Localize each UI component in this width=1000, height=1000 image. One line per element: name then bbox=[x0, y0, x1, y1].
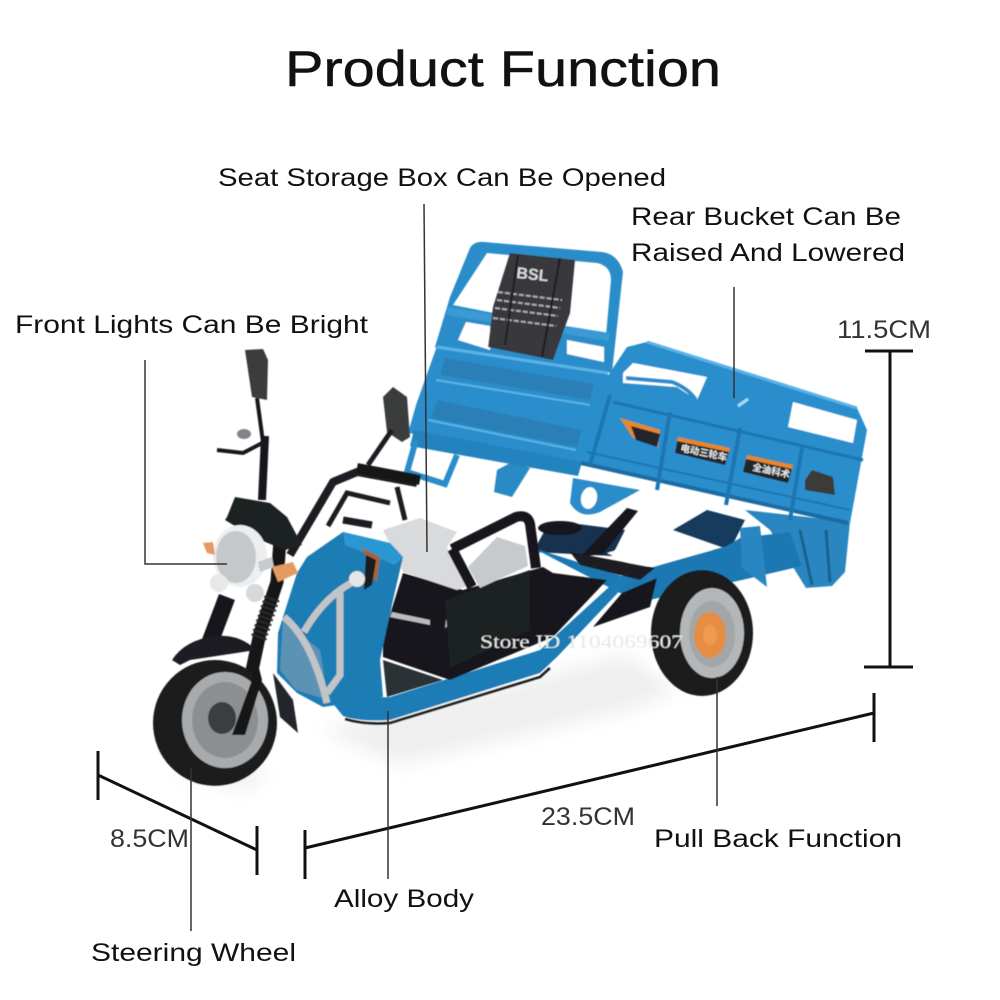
right bar and stem bbox=[290, 472, 417, 555]
label: rear bucket bbox=[631, 203, 905, 398]
headboard inner crossbar bbox=[447, 311, 609, 337]
sticker: 全油科术 bbox=[743, 455, 793, 483]
floor mat bbox=[383, 660, 443, 697]
battery box bbox=[383, 567, 607, 680]
stripe sticker bbox=[805, 470, 835, 495]
bucket side panel bbox=[580, 342, 867, 523]
ground shadow bbox=[170, 655, 680, 790]
headlight bbox=[210, 525, 267, 602]
title: Product Function bbox=[285, 41, 721, 97]
seat backrest handle bbox=[452, 516, 536, 587]
label: seat storage box: Seat Storage Box Can Be Opened bbox=[218, 164, 666, 192]
lower headboard openings bbox=[458, 322, 604, 362]
vent bbox=[360, 547, 380, 582]
dark under-bucket area bbox=[673, 510, 745, 550]
front shield bbox=[277, 532, 403, 707]
label: front lights: Front Lights Can Be Bright bbox=[15, 311, 368, 339]
front panel of bucket bbox=[408, 346, 608, 463]
label: rear bucket: Rear Bucket Can Be bbox=[631, 203, 901, 231]
seat cushion bbox=[383, 518, 470, 590]
rear wheel bbox=[651, 570, 753, 696]
label: seat storage box bbox=[218, 164, 666, 552]
main floor frame bbox=[330, 577, 630, 720]
front fork bbox=[240, 540, 280, 727]
lamp box bbox=[225, 497, 302, 550]
left mirror bbox=[245, 349, 268, 400]
watermark: Store ID 1104069607 bbox=[480, 632, 683, 653]
headboard straps bbox=[488, 253, 575, 360]
reflective mark bbox=[738, 399, 748, 406]
bucket rear support bracket bbox=[745, 510, 850, 588]
label: alloy body: Alloy Body bbox=[334, 885, 475, 913]
dimension: height 11.5CM: 11.5CM bbox=[837, 316, 931, 344]
dimension: height 11.5CM bbox=[837, 316, 931, 667]
side panel posts bbox=[590, 395, 802, 520]
rear chassis cross beam bbox=[533, 532, 802, 602]
turn signals bbox=[203, 542, 215, 555]
headboard frame bbox=[435, 242, 623, 380]
right mirror bbox=[383, 387, 410, 442]
crash bar bbox=[284, 580, 357, 703]
sticker: 电动三轮车: 电动三轮车 bbox=[679, 442, 729, 464]
dimension: width 8.5CM bbox=[98, 751, 257, 875]
sticker: 电动三轮车 bbox=[675, 437, 730, 465]
label: rear bucket: Raised And Lowered bbox=[631, 239, 905, 267]
lift strut bbox=[580, 508, 638, 557]
front fender bbox=[172, 636, 256, 665]
dimension: width 8.5CM: 8.5CM bbox=[110, 825, 189, 853]
rear fender bbox=[273, 673, 298, 733]
bucket lower lip bbox=[410, 430, 582, 476]
front wheel bbox=[153, 660, 277, 786]
headboard straps: BSL bbox=[516, 265, 549, 285]
label: pull back function: Pull Back Function bbox=[654, 825, 902, 853]
dimension: length 23.5CM: 23.5CM bbox=[541, 803, 635, 831]
label: steering wheel: Steering Wheel bbox=[91, 939, 296, 967]
left mirror stem and bar bbox=[217, 398, 268, 453]
sticker: 全油科术: 全油科术 bbox=[751, 461, 792, 481]
label: front lights bbox=[15, 311, 368, 564]
illustration: blue electric cargo tricycle bbox=[153, 242, 867, 790]
rail windows bbox=[623, 363, 707, 400]
chevron sticker bbox=[620, 418, 660, 447]
dimension: length 23.5CM bbox=[305, 693, 874, 879]
left hanger loop bbox=[407, 440, 457, 484]
bucket lower hinge bracket and chevron struts bbox=[570, 478, 640, 515]
